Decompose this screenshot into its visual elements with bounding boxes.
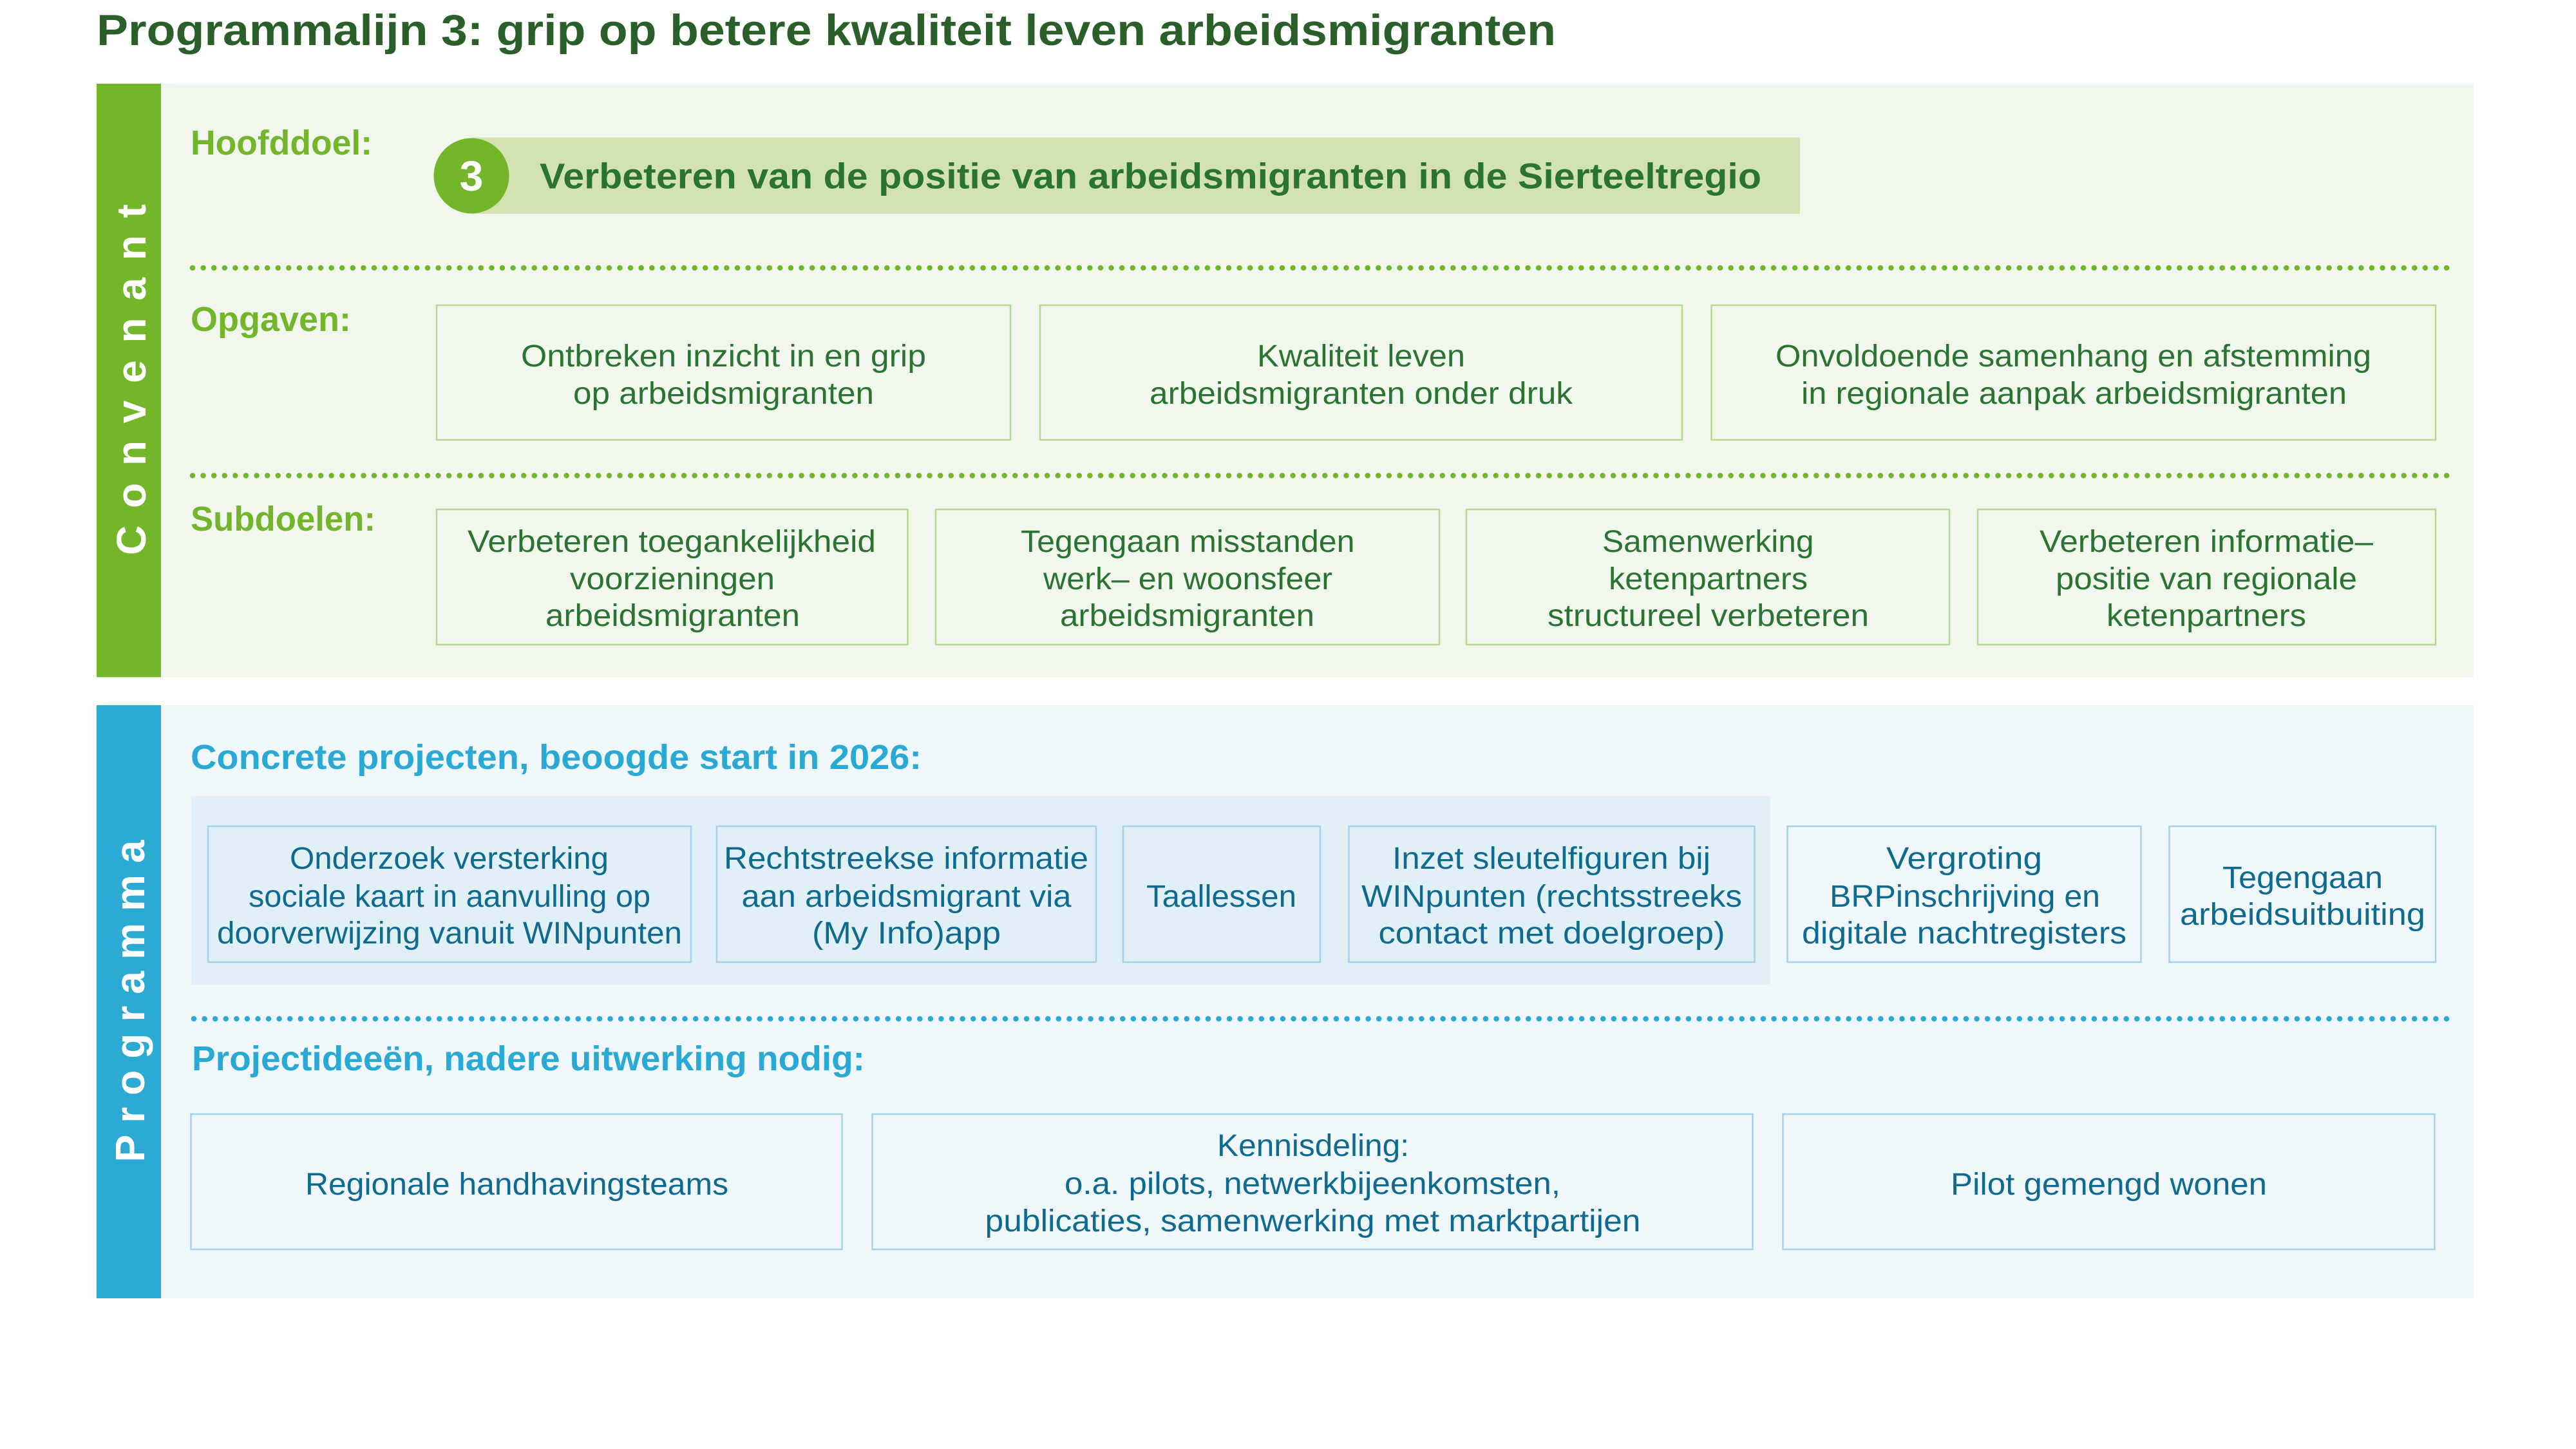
box: idea 3 [1783,1114,2434,1249]
box: opgave 1: Ontbreken inzicht in en grip [521,339,926,374]
box: project 1 [208,826,691,962]
box: project 2 [717,826,1096,962]
main goal banner [434,138,1800,214]
box: subdoel 4 [1978,509,2436,645]
box: subdoel 3 [1466,509,1949,645]
box: idea 2 [872,1114,1753,1249]
box: opgave 2: arbeidsmigranten onder druk [1150,377,1573,411]
heading: Subdoelen: Subdoelen: [191,500,375,538]
sidebar: Convenant [97,84,161,677]
box: opgave 3 [1712,305,2436,440]
box: project 6: arbeidsuitbuiting [2180,898,2425,932]
heading: Projectideeen: Projectideeën, nadere uitwerking nodig: [192,1039,865,1078]
panel: Convenant [97,84,2474,677]
sidebar: Programma: Programma [107,840,153,1162]
box: subdoel 2: Tegengaan misstanden [1021,525,1355,559]
box: idea 2: publicaties, samenwerking met marktpartijen [985,1204,1641,1238]
box: project 5: BRPinschrijving en [1830,880,2100,914]
box: project 2: aan arbeidsmigrant via [742,880,1072,914]
box: project 6: Tegengaan [2222,861,2383,895]
box: subdoel 3: structureel verbeteren [1548,599,1869,633]
box: project 4 [1349,826,1754,962]
heading: Opgaven: Opgaven: [191,300,351,339]
box: project 4: contact met doelgroep) [1378,916,1725,951]
box: subdoel 2: arbeidsmigranten [1060,599,1314,633]
box: project 2: Rechtstreekse informatie [724,842,1088,876]
box: idea 2: Kennisdeling: [1217,1129,1409,1163]
box: opgave 1 [437,305,1010,440]
box: project 3 [1123,826,1320,962]
box: opgave 1: op arbeidsmigranten [573,377,874,411]
box: opgave 3: in regionale aanpak arbeidsmigranten [1801,377,2347,411]
box: idea 1: Regionale handhavingsteams [305,1168,728,1202]
box: subdoel 4: ketenpartners [2107,599,2306,633]
number badge: 3 [460,152,483,200]
box: subdoel 3: ketenpartners [1609,562,1808,596]
sidebar: Programma [97,705,161,1298]
band: grouped projects [191,796,1770,985]
box: project 6 [2169,826,2436,962]
box: idea 1 [191,1114,842,1249]
number badge [434,138,509,214]
box: project 1: doorverwijzing vanuit WINpunten [217,916,682,951]
main goal text: Verbeteren van de positie van arbeidsmigranten in de Sierteeltregio [540,156,1761,196]
box: project 3: Taallessen [1146,880,1296,914]
box: project 1: sociale kaart in aanvulling op [249,880,650,914]
box: opgave 2: Kwaliteit leven [1257,339,1465,374]
box: subdoel 1: voorzieningen [570,562,775,596]
box: opgave 2 [1040,305,1682,440]
box: project 2: (My Info)app [812,916,1001,951]
box: idea 3: Pilot gemengd wonen [1951,1168,2267,1202]
box: subdoel 2 [936,509,1439,645]
box: project 5: Vergroting [1886,842,2042,876]
box: subdoel 1: arbeidsmigranten [545,599,800,633]
heading: Concrete projecten: Concrete projecten, beoogde start in 2026: [191,738,922,777]
box: subdoel 3: Samenwerking [1602,525,1814,559]
box: project 5: digitale nachtregisters [1802,916,2126,951]
title: Programmalijn 3: grip op betere kwaliteit leven arbeidsmigranten [97,6,1556,55]
box: subdoel 4: Verbeteren informatie– [2040,525,2373,559]
panel: Programma [97,705,2474,1298]
box: subdoel 1: Verbeteren toegankelijkheid [468,525,876,559]
box: subdoel 4: positie van regionale [2056,562,2357,596]
box: project 5 [1788,826,2141,962]
box: idea 2: o.a. pilots, netwerkbijeenkomsten, [1065,1167,1560,1201]
box: project 4: WINpunten (rechtsstreeks [1361,880,1742,914]
box: project 1: Onderzoek versterking [290,842,609,876]
box: subdoel 1 [437,509,908,645]
box: project 4: Inzet sleutelfiguren bij [1392,842,1710,876]
sidebar: Convenant: Convenant [108,204,155,555]
heading: Hoofddoel: Hoofddoel: [191,124,372,162]
box: opgave 3: Onvoldoende samenhang en afstemming [1776,339,2371,374]
box: subdoel 2: werk– en woonsfeer [1043,562,1332,596]
